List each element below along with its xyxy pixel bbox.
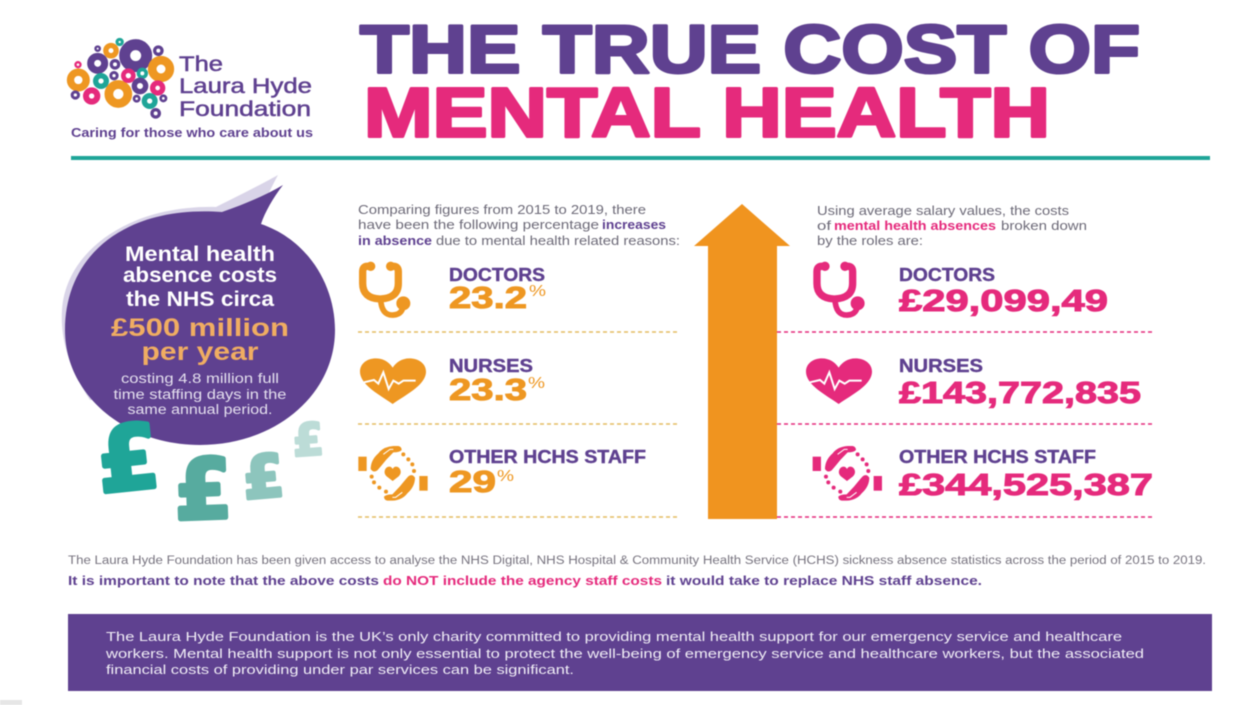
other staff cost stat: £344,525,387 bbox=[899, 467, 1153, 502]
divider bbox=[358, 423, 680, 425]
logo wordmark: Foundation bbox=[179, 98, 311, 121]
left intro text: in absence bbox=[358, 234, 432, 248]
nurses increase stat: % bbox=[528, 375, 545, 392]
footer text: The Laura Hyde Foundation is the UK’s only charity committed to providing mental health support for our emergency service and healthcare bbox=[106, 629, 1122, 644]
bubble text bbox=[111, 243, 289, 417]
bubble text: time staffing days in the bbox=[114, 387, 286, 402]
left intro text: have been the following percentage bbox=[358, 218, 599, 232]
title bbox=[360, 12, 1140, 152]
doctors cost stat: £29,099,49 bbox=[899, 283, 1108, 318]
left intro text: increases bbox=[602, 218, 666, 232]
footer panel bbox=[68, 614, 1212, 691]
pound signs: £ bbox=[92, 404, 164, 513]
icon: caring hands with heart (orange) bbox=[358, 446, 428, 501]
divider bbox=[777, 516, 1155, 518]
title: MENTAL HEALTH bbox=[364, 74, 1050, 152]
left intro text: Comparing figures from 2015 to 2019, there bbox=[358, 203, 646, 217]
right intro text bbox=[817, 204, 1087, 248]
doctors increase stat: % bbox=[529, 283, 546, 300]
divider bbox=[358, 516, 680, 518]
bubble text: absence costs bbox=[123, 264, 277, 287]
agency cost note: it would take to replace NHS staff absence. bbox=[666, 573, 982, 588]
logo: The Laura Hyde Foundation bbox=[70, 39, 313, 140]
footer text: workers. Mental health support is not only essential to protect the well-being of emergency service and healthcare workers, but the associated bbox=[105, 646, 1144, 661]
divider bbox=[777, 331, 1155, 333]
doctors increase stat: 23.2 bbox=[449, 280, 527, 315]
pound signs bbox=[92, 404, 325, 539]
pound signs: £ bbox=[240, 441, 286, 513]
agency cost note: do NOT include the agency staff costs bbox=[383, 573, 662, 588]
footer text bbox=[105, 629, 1144, 677]
central up arrow bbox=[694, 204, 790, 519]
source note: The Laura Hyde Foundation has been given access to analyse the NHS Digital, NHS Hospital & Community Health Service (HCHS) sickness absence statistics across the period of 2015 to 2019. bbox=[68, 555, 1206, 567]
logo icon: cluster of coloured rings bbox=[70, 39, 170, 117]
pound signs: £ bbox=[291, 414, 325, 467]
icon: stethoscope (pink) bbox=[817, 264, 863, 315]
left intro text: due to mental health related reasons: bbox=[436, 234, 680, 248]
nurses cost stat: £143,772,835 bbox=[899, 375, 1141, 410]
nurses increase stat: NURSES bbox=[449, 356, 533, 376]
nurses increase stat bbox=[449, 356, 545, 407]
bubble text: same annual period. bbox=[128, 402, 272, 417]
teal divider rule bbox=[71, 156, 1210, 160]
speech bubble: headline statistic bbox=[62, 175, 335, 445]
footer text: financial costs of providing under par services can be significant. bbox=[106, 662, 574, 677]
bubble text: Mental health bbox=[125, 243, 275, 266]
logo wordmark bbox=[179, 53, 312, 121]
icon: caring hands with heart (pink) bbox=[813, 446, 882, 501]
nurses increase stat: 23.3 bbox=[449, 372, 527, 407]
bubble text: per year bbox=[142, 338, 259, 366]
agency cost note bbox=[68, 573, 982, 588]
icon: heart with pulse (pink) bbox=[806, 358, 872, 404]
right intro text: of bbox=[817, 219, 832, 233]
divider bbox=[358, 331, 680, 333]
right intro text: mental health absences bbox=[834, 219, 996, 233]
doctors cost stat: DOCTORS bbox=[899, 265, 995, 285]
doctors increase stat bbox=[449, 265, 546, 315]
icon: heart with pulse (orange) bbox=[360, 358, 426, 404]
bubble text: the NHS circa bbox=[126, 288, 274, 311]
other staff increase stat bbox=[449, 447, 646, 499]
doctors cost stat bbox=[899, 265, 1108, 318]
nurses cost stat bbox=[899, 356, 1141, 410]
bubble shadow bbox=[62, 175, 278, 400]
other staff increase stat: % bbox=[497, 468, 514, 485]
logo wordmark: Laura Hyde bbox=[179, 75, 312, 98]
nurses cost stat: NURSES bbox=[899, 356, 983, 376]
right intro text: broken down bbox=[1001, 219, 1087, 233]
other staff cost stat: OTHER HCHS STAFF bbox=[899, 447, 1096, 467]
logo wordmark: The bbox=[179, 53, 223, 76]
right intro text: Using average salary values, the costs bbox=[817, 204, 1069, 218]
agency cost note: It is important to note that the above costs bbox=[68, 573, 379, 588]
other staff cost stat bbox=[899, 447, 1153, 502]
bubble text: costing 4.8 million full bbox=[121, 371, 279, 386]
left intro text bbox=[358, 203, 680, 248]
logo tagline: Caring for those who care about us bbox=[71, 125, 313, 140]
other staff increase stat: OTHER HCHS STAFF bbox=[449, 447, 646, 467]
title: THE TRUE COST OF bbox=[360, 12, 1140, 88]
right intro text: by the roles are: bbox=[817, 234, 923, 248]
icon: stethoscope (orange) bbox=[363, 264, 408, 315]
divider bbox=[777, 423, 1155, 425]
other staff increase stat: 29 bbox=[449, 464, 496, 499]
doctors increase stat: DOCTORS bbox=[449, 265, 545, 285]
bubble body bbox=[65, 185, 335, 445]
bubble text: £500 million bbox=[111, 314, 289, 342]
pound signs: £ bbox=[173, 442, 233, 539]
